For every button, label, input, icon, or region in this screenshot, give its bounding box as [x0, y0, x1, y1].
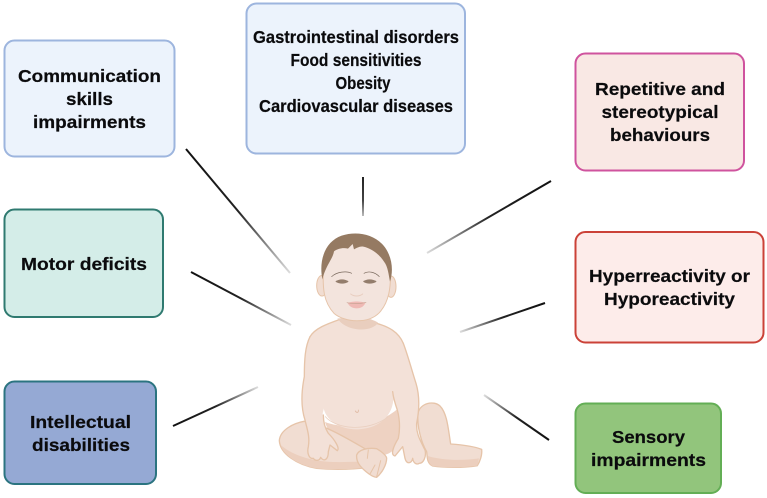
- baby: toes: [367, 450, 381, 477]
- illustration: seated baby: [279, 233, 482, 477]
- baby: hair: [321, 233, 392, 282]
- panel: hyperreactivity or hyporeactivity: Hyporeactivity: [604, 289, 735, 309]
- baby: lip line: [347, 302, 366, 304]
- baby: eyebrows: [332, 272, 379, 277]
- panel: repetitive and stereotypical behaviours: Repetitive and: [595, 79, 725, 99]
- baby: shoulder outline: [310, 319, 403, 343]
- baby: viewer-right arm: [393, 343, 425, 464]
- panel: repetitive and stereotypical behaviours: behaviours: [610, 125, 710, 145]
- baby: crossed leg shadow: [281, 445, 367, 469]
- panel: repetitive and stereotypical behaviours: stereotypical: [602, 102, 718, 122]
- baby: neck shadow: [337, 317, 378, 330]
- panel: sensory impairments: [576, 404, 721, 493]
- baby: mouth: [348, 301, 365, 308]
- baby: navel: [355, 410, 358, 412]
- panel: communication skills impairments: skills: [66, 89, 113, 109]
- panel: hyperreactivity or hyporeactivity: Hyperreactivity or: [589, 266, 750, 286]
- panel: motor deficits: [4, 210, 163, 317]
- baby: raised foot shadow: [428, 456, 479, 467]
- panel: sensory impairments: Sensory: [612, 427, 685, 447]
- panel: gastrointestinal and metabolic conditions: [246, 4, 465, 154]
- panel: intellectual disabilities: disabilities: [32, 435, 130, 455]
- line: repetitive to baby: [427, 181, 551, 253]
- line: intellectual to baby: [173, 387, 258, 426]
- line: motor to baby: [191, 272, 291, 325]
- panel: repetitive and stereotypical behaviours: [576, 54, 744, 170]
- panel: intellectual disabilities: [4, 382, 156, 484]
- baby: viewer-left arm outline: [302, 337, 338, 460]
- baby: front foot: [357, 448, 387, 477]
- line: communication to baby: [186, 149, 290, 273]
- panel: intellectual disabilities: Intellectual: [30, 412, 131, 432]
- panel: gastrointestinal and metabolic conditions: Food sensitivities: [290, 50, 422, 70]
- baby: crossed leg: [279, 421, 373, 469]
- baby: raised leg and foot: [418, 403, 482, 467]
- baby: left ear: [317, 275, 327, 296]
- panel: motor deficits: Motor deficits: [21, 254, 147, 274]
- baby: torso: [306, 315, 403, 429]
- panel: communication skills impairments: [4, 40, 174, 156]
- panel: communication skills impairments: Communication: [18, 66, 161, 86]
- baby: belly crease: [325, 417, 388, 427]
- baby: right eye: [363, 279, 377, 284]
- panel: gastrointestinal and metabolic conditions: Gastrointestinal disorders: [253, 27, 459, 47]
- panel: hyperreactivity or hyporeactivity: [576, 232, 764, 342]
- baby: right ear: [386, 276, 396, 297]
- panel: gastrointestinal and metabolic conditions: Cardiovascular diseases: [259, 96, 453, 116]
- panel: gastrointestinal and metabolic conditions: Obesity: [336, 73, 391, 93]
- line: sensory to baby: [484, 395, 549, 440]
- baby: left eye: [335, 279, 349, 284]
- baby: viewer-left arm: [302, 337, 338, 460]
- line: hyperreactivity to baby: [460, 303, 545, 332]
- line: gastrointestinal to baby: [362, 177, 364, 216]
- baby: head: [323, 238, 390, 321]
- baby: diaper area: [325, 408, 401, 455]
- baby: nose: [351, 294, 363, 296]
- panel: communication skills impairments: impairments: [33, 112, 146, 132]
- panel: sensory impairments: impairments: [591, 450, 706, 470]
- baby: viewer-right arm outline: [393, 343, 425, 464]
